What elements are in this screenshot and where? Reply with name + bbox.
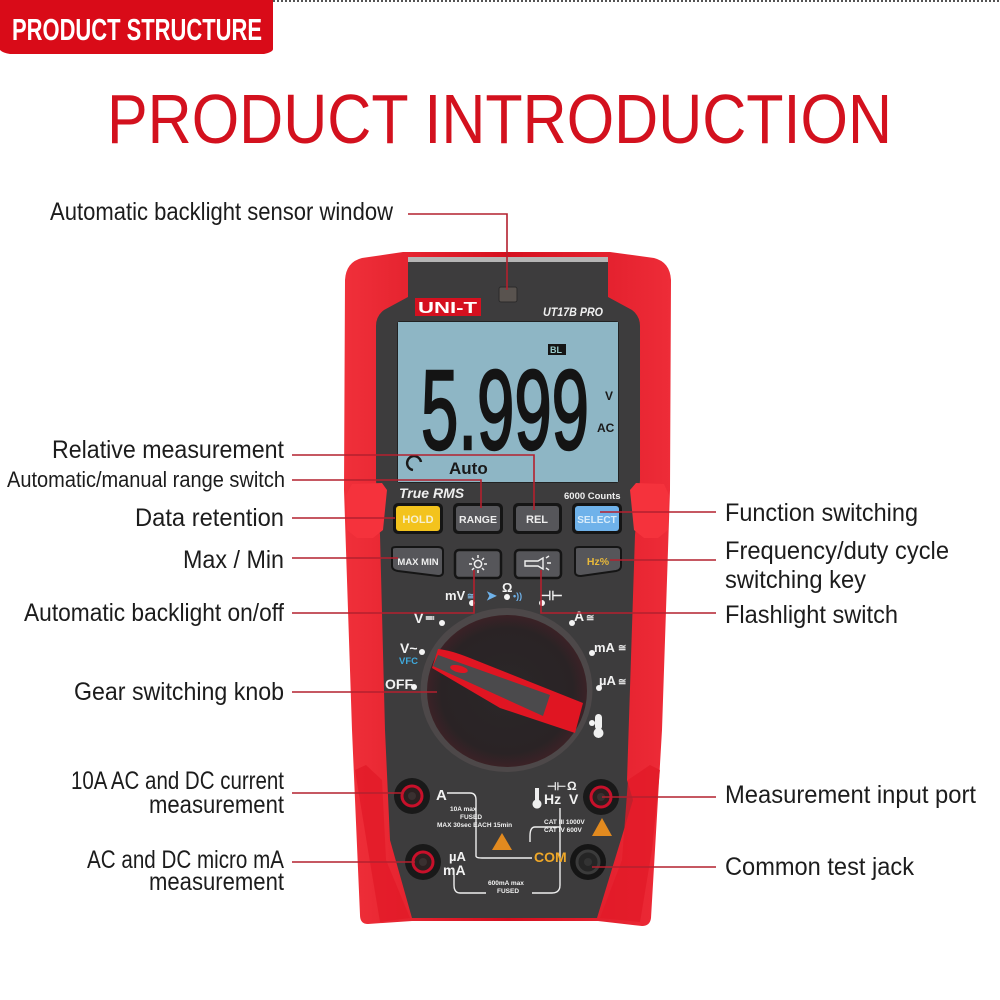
- sensor window: [499, 287, 517, 302]
- panel markings: FUSED: [460, 814, 482, 821]
- callout: flashlight: Flashlight switch: [725, 601, 898, 629]
- dark front face: [376, 262, 640, 918]
- True RMS: True RMS: [399, 485, 465, 501]
- icon: flashlight: [525, 556, 551, 570]
- panel markings: [436, 779, 612, 895]
- panel markings: µA: [449, 849, 466, 864]
- callout: data retention: Data retention: [135, 504, 284, 532]
- dial labels: [385, 580, 626, 692]
- dial labels: ≕: [425, 613, 435, 624]
- panel markings: COM: [534, 849, 567, 865]
- rotary knob: [420, 608, 592, 772]
- logo UNI-T: UNI-T: [418, 300, 477, 317]
- BL indicator: [548, 344, 566, 355]
- dial labels: ≅: [467, 591, 475, 601]
- logo UNI-T: [415, 298, 481, 317]
- icon: thermometer: [594, 714, 604, 738]
- button row 2: [392, 547, 621, 578]
- dial dots: [411, 594, 602, 726]
- dial labels: mA: [594, 640, 616, 655]
- button row 1: RANGE: [459, 514, 497, 526]
- top metal strip: [408, 257, 608, 266]
- dial labels: ➤: [486, 588, 497, 603]
- callout: sensor window: Automatic backlight sensor window: [50, 198, 394, 226]
- callout: 10A: 10A AC and DC current: [71, 767, 284, 795]
- callout: common jack: Common test jack: [725, 853, 914, 881]
- side bumpers: [346, 483, 669, 538]
- button row 1: REL: [526, 514, 548, 526]
- dial labels: mV: [445, 588, 466, 603]
- dial labels: •)): [513, 591, 522, 601]
- icon: sun: [469, 555, 487, 573]
- reading: 5.999: [421, 347, 589, 473]
- dial labels: V: [414, 610, 424, 626]
- leader lines: [292, 214, 716, 867]
- callout: frequency duty: switching key: [725, 566, 866, 594]
- panel markings: mA: [443, 862, 466, 878]
- callout: micro mA: [87, 846, 284, 896]
- knob handle: [432, 649, 583, 733]
- dial labels: V~: [400, 640, 418, 656]
- callout: knob: Gear switching knob: [74, 678, 284, 706]
- model name: UT17B PRO: [543, 305, 604, 319]
- BL indicator: BL: [550, 345, 562, 355]
- dial labels: ⊣⊢: [540, 588, 563, 603]
- callout: range switch: Automatic/manual range switch: [7, 467, 285, 492]
- panel markings: FUSED: [497, 888, 519, 895]
- callout: frequency duty: Frequency/duty cycle: [725, 537, 949, 565]
- callout: max min: Max / Min: [183, 546, 284, 574]
- callout: 10A: [71, 767, 284, 819]
- callout: frequency duty: [725, 537, 949, 594]
- dial labels: ≅: [618, 643, 626, 654]
- dial labels: ≅: [618, 677, 626, 688]
- dial labels: ≅: [586, 613, 594, 624]
- panel markings: A: [436, 787, 447, 804]
- panel markings: V: [569, 791, 579, 807]
- button row 1: [393, 503, 622, 534]
- Auto: Auto: [449, 459, 488, 478]
- panel markings: Hz: [544, 791, 561, 807]
- auto power icon: [407, 456, 421, 470]
- callout: measurement port: Measurement input port: [725, 781, 976, 809]
- multimeter: [344, 252, 671, 926]
- icon: thermometer small: [532, 788, 542, 809]
- panel markings: Ω: [567, 779, 577, 793]
- unit V: V: [605, 389, 613, 403]
- unit AC: AC: [597, 421, 615, 435]
- badge: product structure: [0, 0, 273, 54]
- panel markings: 10A max: [450, 806, 477, 813]
- dial labels: VFC: [399, 656, 418, 667]
- dial labels: A: [574, 608, 584, 624]
- panel markings: 600mA max: [488, 880, 524, 887]
- button row 2: Hz%: [587, 556, 610, 568]
- dial labels: OFF: [385, 676, 413, 692]
- panel markings: ⊣⊢: [547, 780, 566, 793]
- icon: warning triangles: [492, 833, 512, 850]
- panel markings: MAX 30sec EACH 15min: [437, 822, 512, 829]
- badge: product structure: PRODUCT STRUCTURE: [12, 12, 262, 47]
- button row 2: MAX MIN: [397, 557, 439, 568]
- callout: micro mA: AC and DC micro mA: [87, 846, 284, 874]
- callout: 10A: measurement: [149, 791, 284, 819]
- dial labels: µA: [599, 673, 616, 688]
- panel markings: CAT III 1000V: [544, 819, 585, 826]
- callout: backlight: Automatic backlight on/off: [24, 599, 284, 627]
- callout: micro mA: measurement: [149, 868, 284, 896]
- 6000 counts: 6000 Counts: [564, 491, 620, 502]
- button row 1: HOLD: [402, 514, 434, 526]
- input ports: [394, 778, 619, 880]
- callout: function switching: Function switching: [725, 499, 918, 527]
- button row 1: SELECT: [577, 515, 617, 526]
- red rubber shell: [344, 252, 671, 926]
- dial labels: Ω: [502, 580, 512, 595]
- panel markings: CAT IV 600V: [544, 827, 582, 834]
- LCD screen: [397, 321, 619, 483]
- title: PRODUCT INTRODUCTION: [107, 80, 892, 158]
- callout: relative measurement: Relative measurement: [52, 436, 284, 464]
